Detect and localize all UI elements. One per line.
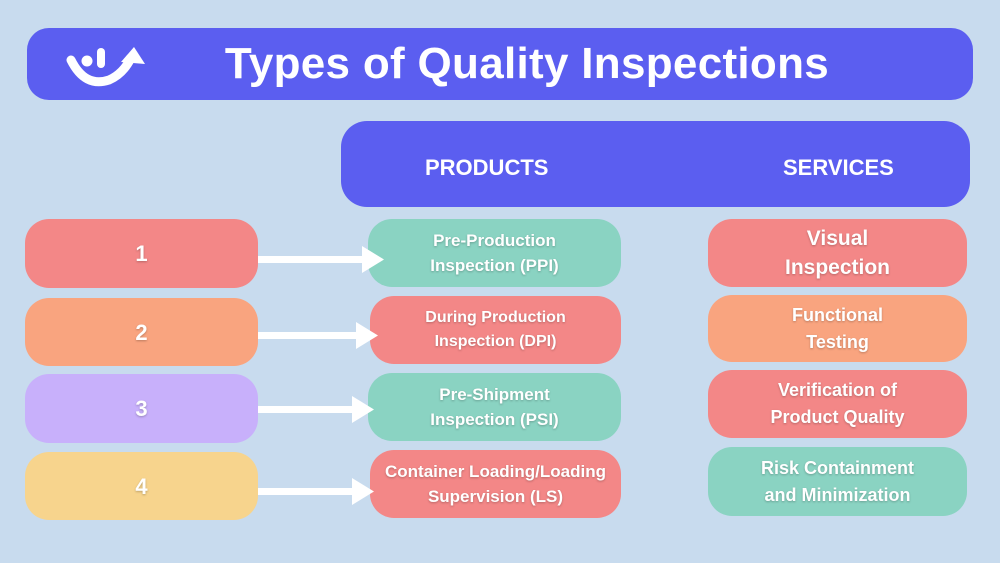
product box 4 <box>370 450 621 518</box>
service box 1: Inspection <box>785 256 890 279</box>
number box 4: 4 <box>135 474 148 498</box>
number box 2 <box>25 298 258 366</box>
product box 1: Pre-Production <box>433 230 556 250</box>
number box 3: 3 <box>135 396 148 421</box>
product box 3: Pre-Shipment <box>439 384 550 404</box>
product box 4: Container Loading/Loading <box>385 462 606 480</box>
header bar: products / services <box>341 121 970 207</box>
number box 4 <box>25 452 258 520</box>
service box 3 <box>708 370 967 438</box>
heading: products: PRODUCTS <box>425 155 548 180</box>
service box 1: Visual <box>807 227 868 250</box>
product box 3: Inspection (PSI) <box>430 410 559 429</box>
product box 1: Inspection (PPI) <box>430 256 559 275</box>
number box 2: 2 <box>135 320 148 344</box>
number box 1 <box>25 219 258 288</box>
heading: services: SERVICES <box>783 155 894 180</box>
icon: smile logo <box>66 47 145 86</box>
title bar <box>27 28 973 100</box>
service box 2: Testing <box>806 332 869 352</box>
service box 3: Product Quality <box>770 407 904 427</box>
service box 4: Risk Containment <box>761 458 914 478</box>
product box 4: Supervision (LS) <box>428 487 563 506</box>
product box 2 <box>370 296 621 364</box>
product box 3 <box>368 373 621 441</box>
title text: Types of Quality Inspections <box>225 39 829 88</box>
service box 4 <box>708 447 967 516</box>
product box 2: During Production <box>425 309 566 326</box>
product box 1 <box>368 219 621 287</box>
number box 1: 1 <box>135 241 148 266</box>
service box 2 <box>708 295 967 362</box>
number box 3 <box>25 374 258 443</box>
product box 2: Inspection (DPI) <box>435 333 556 350</box>
service box 4: and Minimization <box>764 484 910 504</box>
service box 2: Functional <box>792 304 883 324</box>
service box 1 <box>708 219 967 287</box>
service box 3: Verification of <box>778 380 897 400</box>
